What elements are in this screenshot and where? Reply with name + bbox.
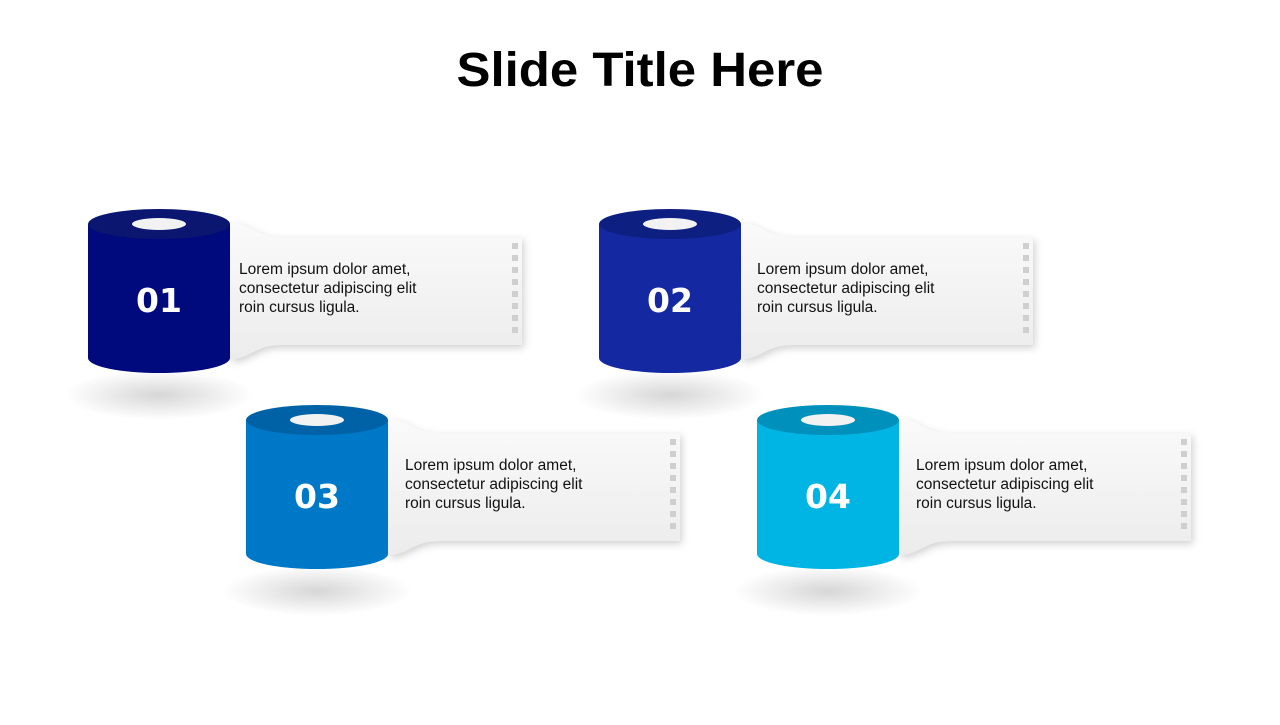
roll 02: 02: [647, 281, 693, 320]
title: Slide Title Here: [456, 44, 824, 97]
text 01: Lorem ipsum dolor amet,: [239, 261, 410, 278]
text 02: Lorem ipsum dolor amet,: [757, 261, 928, 278]
text 04: consectetur adipiscing elit: [916, 476, 1094, 493]
roll 04: [733, 405, 1191, 616]
roll 02: [575, 209, 1033, 420]
text 03: consectetur adipiscing elit: [405, 476, 583, 493]
text 03: Lorem ipsum dolor amet,: [405, 457, 576, 474]
text 04: roin cursus ligula.: [916, 495, 1037, 512]
text 03: roin cursus ligula.: [405, 495, 526, 512]
text 01: roin cursus ligula.: [239, 299, 360, 316]
roll 03: [222, 405, 680, 616]
roll 01: 01: [136, 281, 182, 320]
text 02: roin cursus ligula.: [757, 299, 878, 316]
roll 03: 03: [294, 477, 340, 516]
text 04: Lorem ipsum dolor amet,: [916, 457, 1087, 474]
roll 04: 04: [805, 477, 851, 516]
roll 01: [64, 209, 522, 420]
text 01: consectetur adipiscing elit: [239, 280, 417, 297]
text 02: consectetur adipiscing elit: [757, 280, 935, 297]
